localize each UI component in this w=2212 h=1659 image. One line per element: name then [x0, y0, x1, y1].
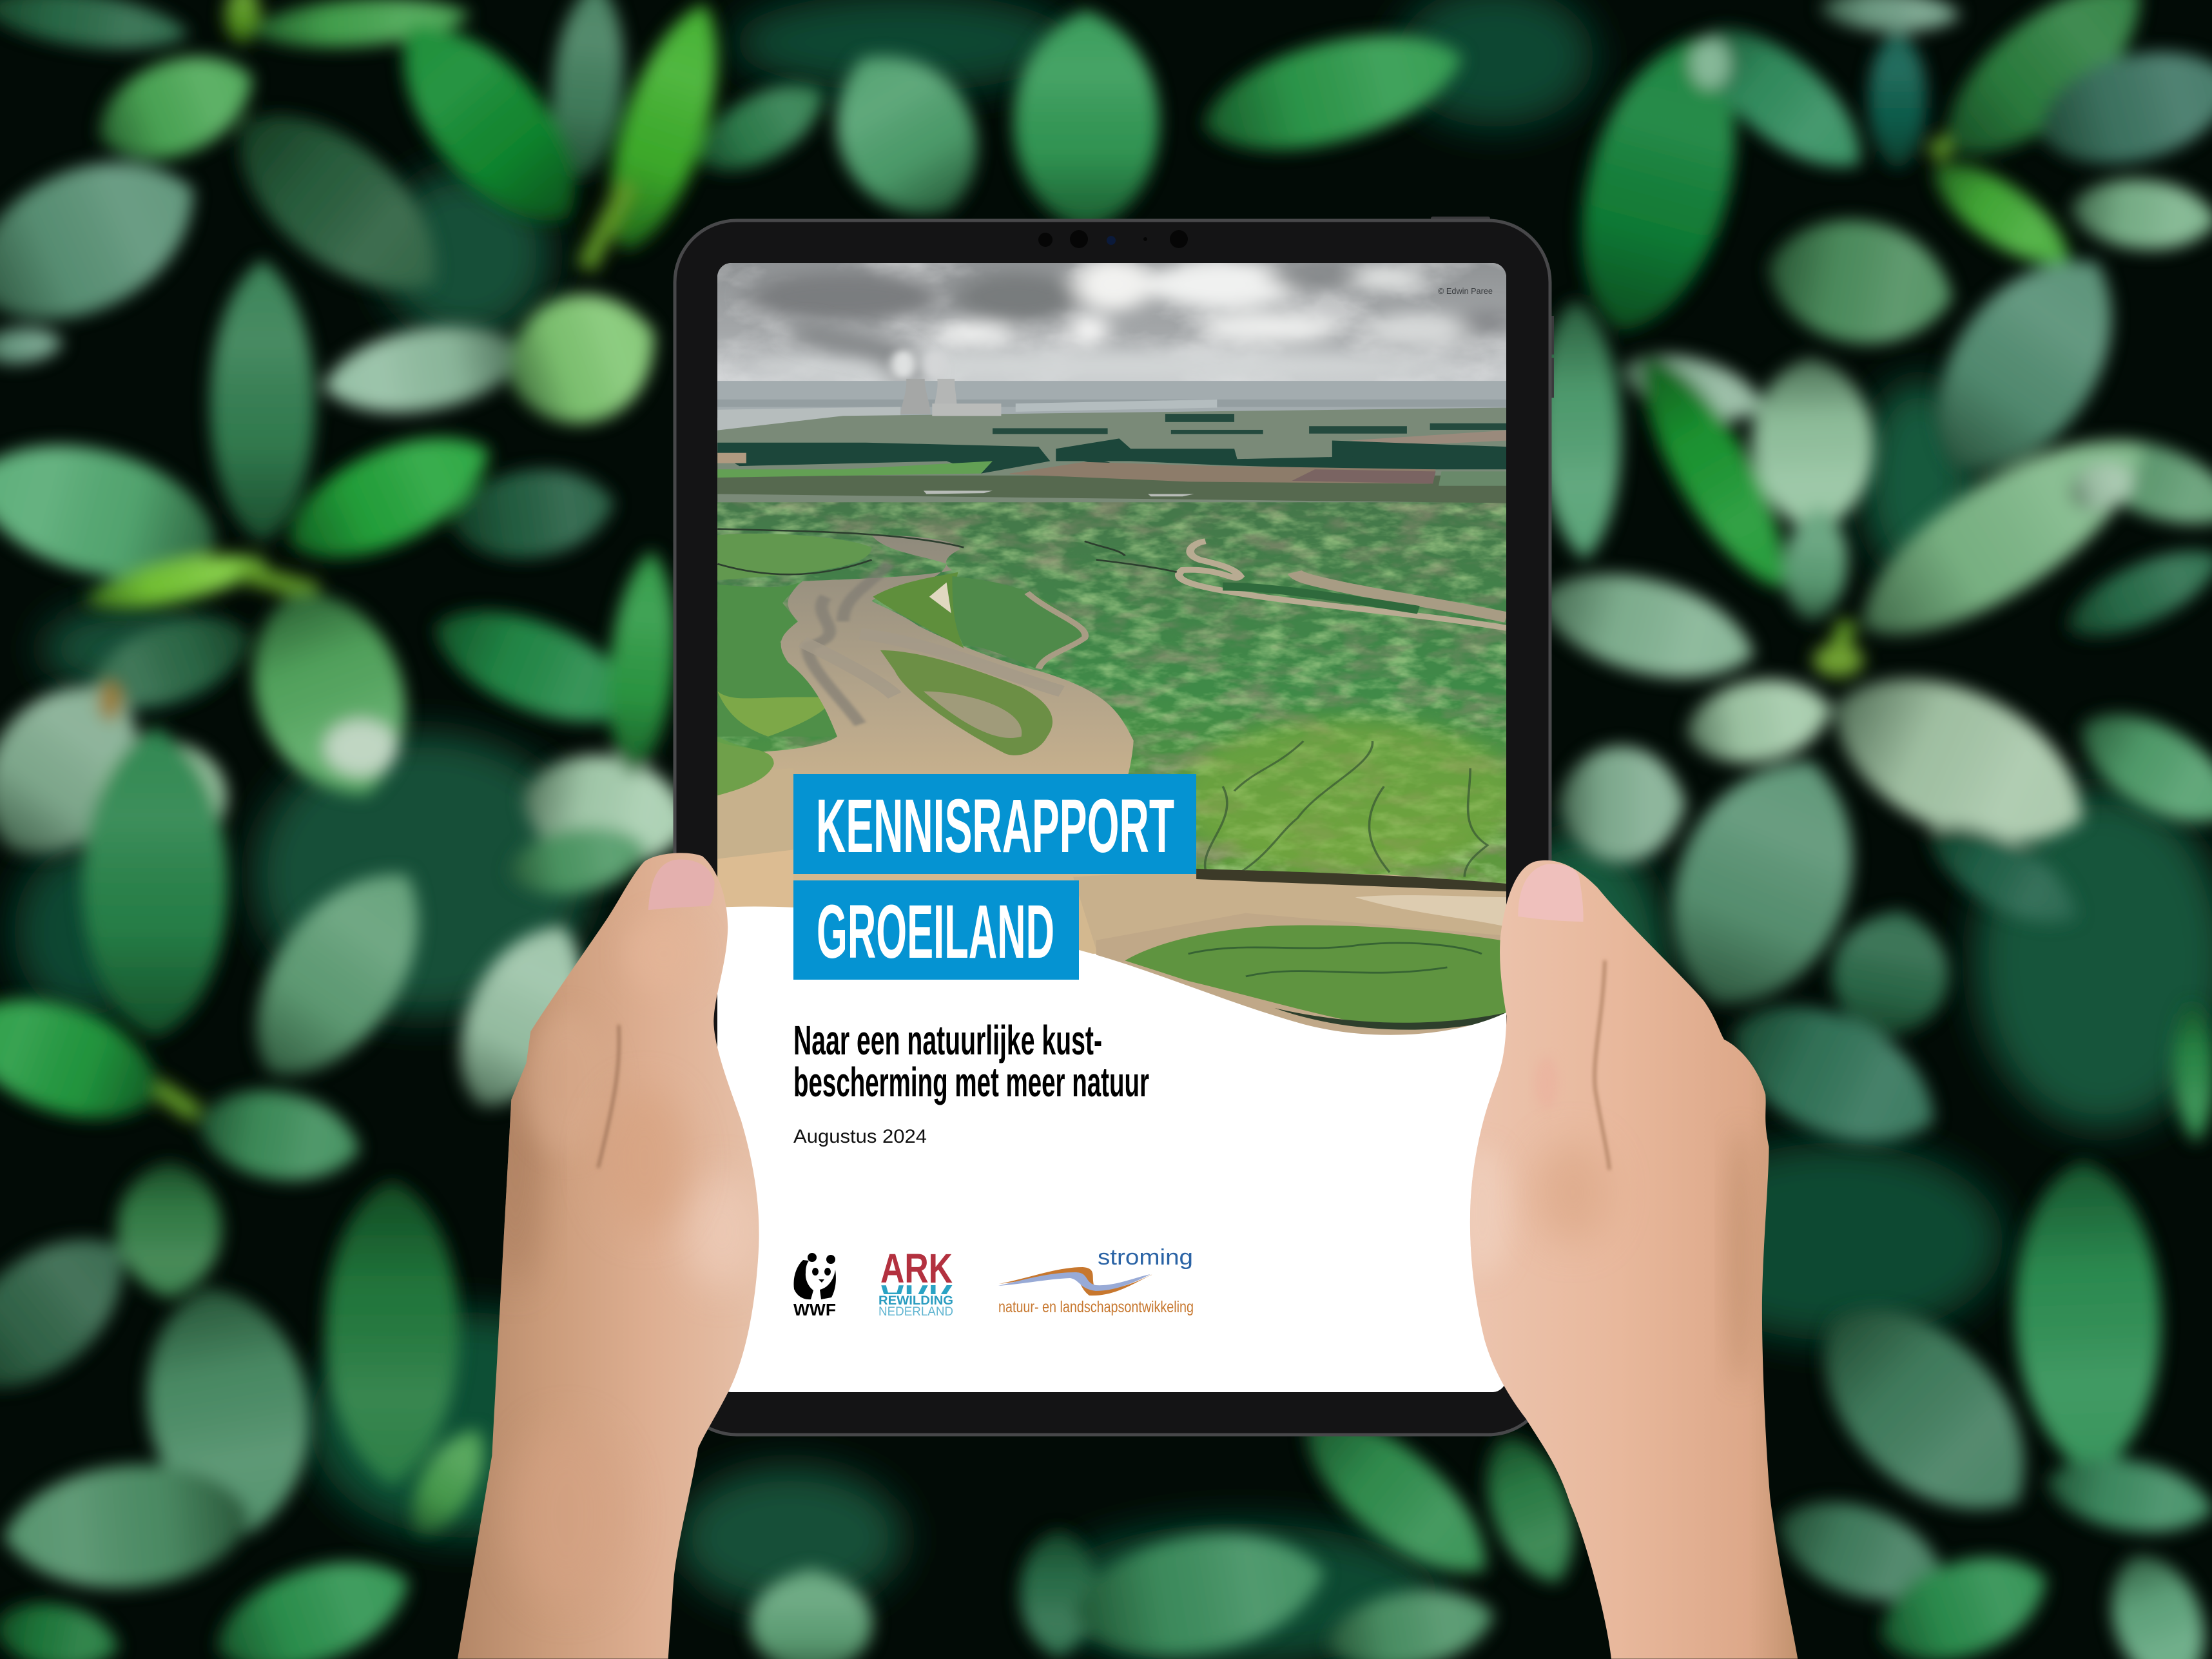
hand shading — [1453, 1057, 1753, 1386]
green marsh island — [1125, 926, 1506, 1027]
logo: Stroming: stroming — [1098, 1245, 1193, 1270]
thumb nail — [1518, 864, 1584, 922]
marsh texture — [717, 451, 1506, 925]
logo: ARK Rewilding Nederland: ARK — [880, 1245, 953, 1292]
logo: Stroming: natuur- en landschapsontwikkeling — [998, 1298, 1194, 1316]
photo credit: © Edwin Paree — [1438, 286, 1493, 296]
farm fields — [717, 461, 993, 478]
title block: Groeiland — [793, 880, 1079, 980]
logo: WWF — [793, 1253, 836, 1319]
tablet screen — [717, 263, 1506, 1392]
thumb crease — [1595, 960, 1609, 1170]
thumb nail — [648, 860, 715, 910]
logo: ARK Rewilding Nederland: REWILDING — [878, 1294, 953, 1308]
river swoosh — [998, 1267, 1152, 1295]
subtitle: bescherming met meer natuur — [793, 1059, 1149, 1105]
tablet bezel — [675, 220, 1550, 1435]
bright marsh glow — [1177, 719, 1522, 873]
salt marsh base — [717, 451, 1506, 925]
logo: ARK Rewilding Nederland — [878, 1245, 953, 1323]
right hand holding tablet — [1453, 860, 1798, 1659]
hand shading — [490, 915, 761, 1605]
leaf stems — [155, 127, 1968, 1114]
panda mark — [794, 1253, 836, 1299]
left hand holding tablet — [458, 853, 761, 1659]
marsh island in the creek — [880, 650, 1053, 755]
upper right creeks — [1179, 541, 1506, 628]
front camera array — [1038, 230, 1188, 248]
tree lines — [717, 438, 1506, 477]
sand under title blocks — [717, 849, 1196, 954]
logo: ARK Rewilding Nederland: NEDERLAND — [878, 1305, 953, 1319]
tablet device — [675, 217, 1554, 1435]
subtitle — [793, 1017, 1149, 1105]
report cover — [716, 258, 1522, 1392]
logo: Stroming — [998, 1245, 1194, 1316]
white wave panel — [717, 907, 1506, 1392]
cover photo: salt marsh with cooling towers — [716, 258, 1522, 1040]
smoke plumes — [797, 327, 947, 379]
cooling towers — [900, 379, 1001, 416]
distant land and water — [717, 379, 1507, 503]
lower sand and marsh plain in zoom coordinates — [716, 719, 1522, 1040]
main sand creek — [717, 535, 1134, 851]
title block: Groeiland: GROEILAND — [817, 889, 1054, 975]
thumb crease — [598, 1025, 619, 1168]
logo: WWF: WWF — [793, 1300, 836, 1319]
title block: Kennisrapport: KENNISRAPPORT — [816, 784, 1174, 869]
tidal creeks in zoom coordinates — [717, 529, 1506, 851]
sky with clouds — [717, 258, 1517, 418]
date: Augustus 2024 — [793, 1126, 927, 1147]
side and top buttons — [1431, 217, 1554, 398]
title block: Kennisrapport — [793, 774, 1196, 874]
logo: ARK Rewilding Nederland: ARK — [880, 1276, 953, 1323]
marsh veins — [1205, 741, 1488, 877]
subtitle: Naar een natuurlijke kust- — [793, 1017, 1102, 1063]
left marsh bank — [717, 534, 872, 580]
